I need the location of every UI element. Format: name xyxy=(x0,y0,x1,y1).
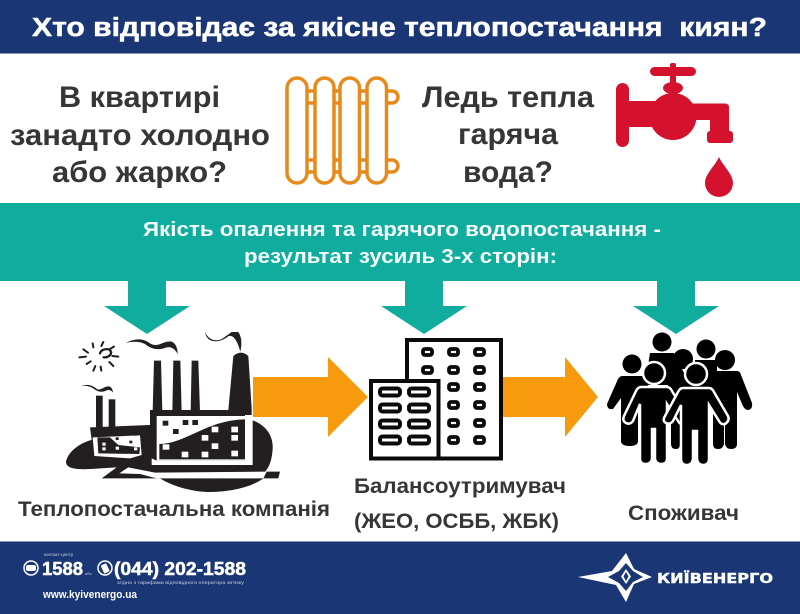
contact phones: 1588 xyxy=(42,559,83,579)
logo: Kyivenergo xyxy=(578,553,773,602)
icon: factory xyxy=(66,332,280,492)
logo: Kyivenergo: КИЇВЕНЕРГО xyxy=(657,571,773,587)
label: consumer: Споживач xyxy=(628,501,739,525)
question: barely warm hot water: вода? xyxy=(463,156,553,189)
arrow: to consumer xyxy=(633,281,719,334)
white bands xyxy=(119,415,267,478)
label: building manager: Балансоутримувач xyxy=(354,474,566,498)
big building xyxy=(157,416,245,461)
question: temperature in apartment xyxy=(10,81,270,189)
question: barely warm hot water: гаряча xyxy=(458,118,559,151)
small building xyxy=(93,435,142,458)
arrow: to building manager xyxy=(381,281,467,334)
contact phones xyxy=(24,552,246,601)
contact phones: згідно з тарифами відповідного оператора зв'язку xyxy=(117,580,245,585)
banner text xyxy=(143,218,661,268)
icon: group of people xyxy=(607,332,752,465)
question: barely warm hot water: Ледь тепла xyxy=(422,81,595,114)
question: barely warm hot water xyxy=(422,81,595,189)
smoke and sun xyxy=(126,339,178,354)
banner text: результат зусиль 3-х сторін: xyxy=(244,245,557,268)
question: temperature in apartment: або жарко? xyxy=(52,156,227,189)
footer bar xyxy=(0,542,800,614)
arrow: to heat company xyxy=(104,281,190,334)
contact phones: (044) 202-1588 xyxy=(114,559,246,579)
flow arrow: company to manager xyxy=(253,357,368,437)
icon: radiator xyxy=(287,78,398,183)
label: heat supply company: Теплопостачальна компанія xyxy=(18,497,330,521)
question: temperature in apartment: занадто холодно xyxy=(10,119,270,152)
icon: apartment buildings xyxy=(371,340,501,458)
title: Хто відповідає за якісне теплопостачання киян? xyxy=(32,14,767,42)
question: temperature in apartment: В квартирі xyxy=(59,81,220,114)
contact phones: або xyxy=(85,571,93,576)
icon: water tap xyxy=(616,63,733,197)
contact phones: контакт-центр xyxy=(44,552,74,557)
website: www.kyivenergo.ua xyxy=(42,589,138,601)
banner text: Якість опалення та гарячого водопостачання - xyxy=(143,218,661,241)
label: building manager: (ЖЕО, ОСББ, ЖБК) xyxy=(354,509,559,533)
flow arrow: manager to consumer xyxy=(503,357,598,437)
label: building manager xyxy=(354,474,566,533)
header bar xyxy=(0,0,800,54)
teal banner with three arrows xyxy=(0,203,800,334)
